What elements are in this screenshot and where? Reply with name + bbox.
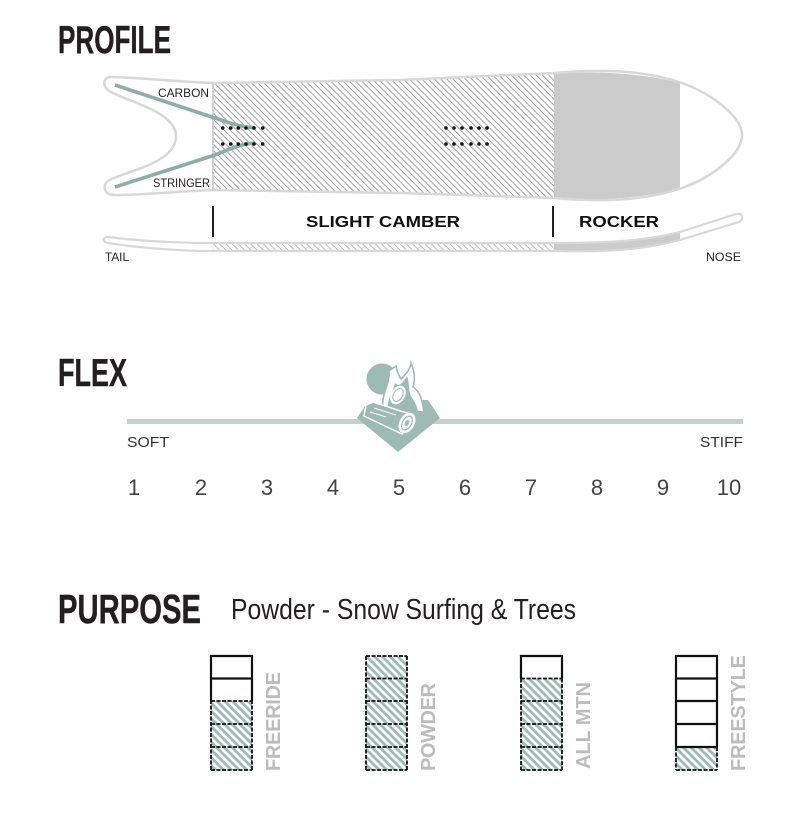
insert dots — [221, 126, 489, 146]
label: soft: SOFT — [127, 434, 169, 451]
flex numbers: 10 — [717, 475, 741, 500]
label: slight camber: SLIGHT CAMBER — [306, 214, 461, 231]
flex numbers: 1 — [128, 475, 140, 500]
panel: all mountain meter — [521, 656, 595, 770]
title: flex: FLEX — [58, 352, 127, 395]
flex numbers: 5 — [393, 475, 405, 500]
panel: board side view — [104, 214, 742, 264]
label: rocker: ROCKER — [579, 214, 660, 231]
flex numbers: 8 — [591, 475, 603, 500]
panel: camber labels — [212, 206, 660, 237]
hatched camber zone — [213, 74, 554, 197]
label: stiff: STIFF — [700, 434, 743, 451]
label: nose: NOSE — [706, 250, 741, 264]
icon: campfire flex marker — [357, 363, 440, 452]
side outline — [104, 214, 742, 251]
flex numbers: 2 — [195, 475, 207, 500]
label: freeride: FREERIDE — [263, 672, 285, 771]
grey rocker zone — [554, 72, 680, 199]
subtitle: Powder - Snow Surfing & Trees — [231, 594, 576, 626]
label: tail: TAIL — [105, 250, 129, 264]
side rocker zone — [554, 232, 680, 251]
tail divider — [212, 83, 214, 190]
flex numbers: 4 — [327, 475, 339, 500]
label: carbon: CARBON — [158, 86, 209, 100]
flex numbers: 7 — [525, 475, 537, 500]
title: profile: PROFILE — [58, 19, 171, 62]
panel: freeride meter — [211, 656, 285, 771]
title: purpose: PURPOSE — [58, 586, 201, 632]
flex numbers — [128, 475, 741, 500]
side hatched zone — [213, 243, 554, 251]
carbon stringers — [115, 85, 255, 187]
panel: powder meter — [366, 656, 440, 771]
divider rocker — [552, 206, 554, 237]
panel: freestyle meter — [676, 655, 750, 771]
divider tail — [212, 206, 214, 237]
panel: board top view — [104, 71, 742, 200]
board outline — [104, 71, 742, 200]
flex numbers: 6 — [459, 475, 471, 500]
label: powder: POWDER — [418, 682, 440, 771]
flex scale bar — [127, 419, 743, 424]
label: stringer: STRINGER — [153, 176, 210, 190]
flex numbers: 9 — [657, 475, 669, 500]
label: all mtn: ALL MTN — [573, 682, 595, 769]
flex numbers: 3 — [261, 475, 273, 500]
label: freestyle: FREESTYLE — [728, 655, 750, 771]
